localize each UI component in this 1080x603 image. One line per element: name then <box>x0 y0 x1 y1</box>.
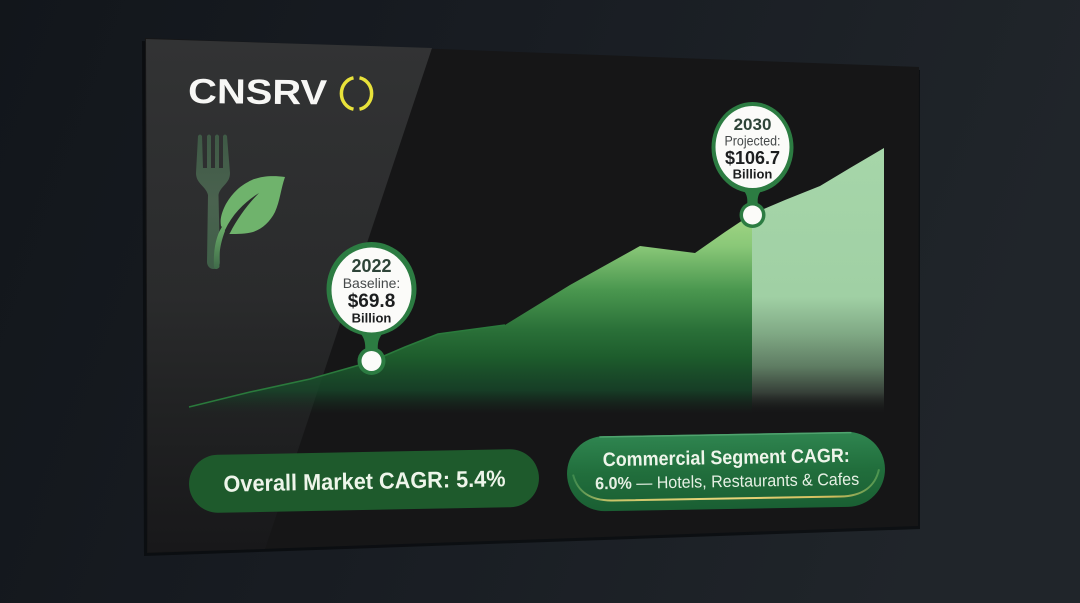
area: projection <box>752 148 884 414</box>
area: 2022 to 2030 <box>189 214 752 414</box>
pin body <box>712 102 794 193</box>
pin label <box>343 256 400 326</box>
screen shadow <box>142 41 920 556</box>
logo ring <box>341 78 372 109</box>
icon: fork <box>196 134 230 269</box>
top highlight <box>599 433 851 437</box>
pill heading: Commercial Segment CAGR: <box>603 445 850 471</box>
marker: 2030 projected <box>712 102 794 228</box>
pill: overall market CAGR <box>188 449 540 513</box>
pill: commercial segment CAGR <box>566 431 886 512</box>
pin label: Billion <box>352 310 391 326</box>
icon: stem <box>214 224 225 269</box>
pin label: $106.7 <box>725 148 780 168</box>
pin label: $69.8 <box>348 291 395 312</box>
pin label: Billion <box>733 166 772 182</box>
icon: fork and leaf <box>196 134 285 269</box>
logo <box>188 72 372 112</box>
pin face <box>332 248 412 332</box>
pill text: Overall Market CAGR: 5.4% <box>223 465 506 497</box>
icon: leaf vein <box>220 193 259 247</box>
pin label: 2022 <box>351 256 392 276</box>
pin dot <box>358 347 386 375</box>
pin body <box>326 242 416 336</box>
marker: 2022 baseline <box>326 242 416 375</box>
pin face <box>716 106 790 188</box>
display panel <box>145 38 919 553</box>
logo wordmark: CNSRV <box>188 72 328 112</box>
gold accent <box>573 469 879 501</box>
pin label: 2030 <box>734 115 771 134</box>
pin label: Projected: <box>724 134 780 148</box>
glass reflection <box>146 39 432 552</box>
icon: leaf <box>221 176 285 234</box>
pin dot <box>740 202 766 228</box>
pin label <box>724 115 780 182</box>
ridge line <box>189 325 505 407</box>
area chart <box>189 148 884 414</box>
pill subtext: 6.0% — Hotels, Restaurants & Cafes <box>595 470 859 493</box>
pin label: Baseline: <box>343 275 400 291</box>
